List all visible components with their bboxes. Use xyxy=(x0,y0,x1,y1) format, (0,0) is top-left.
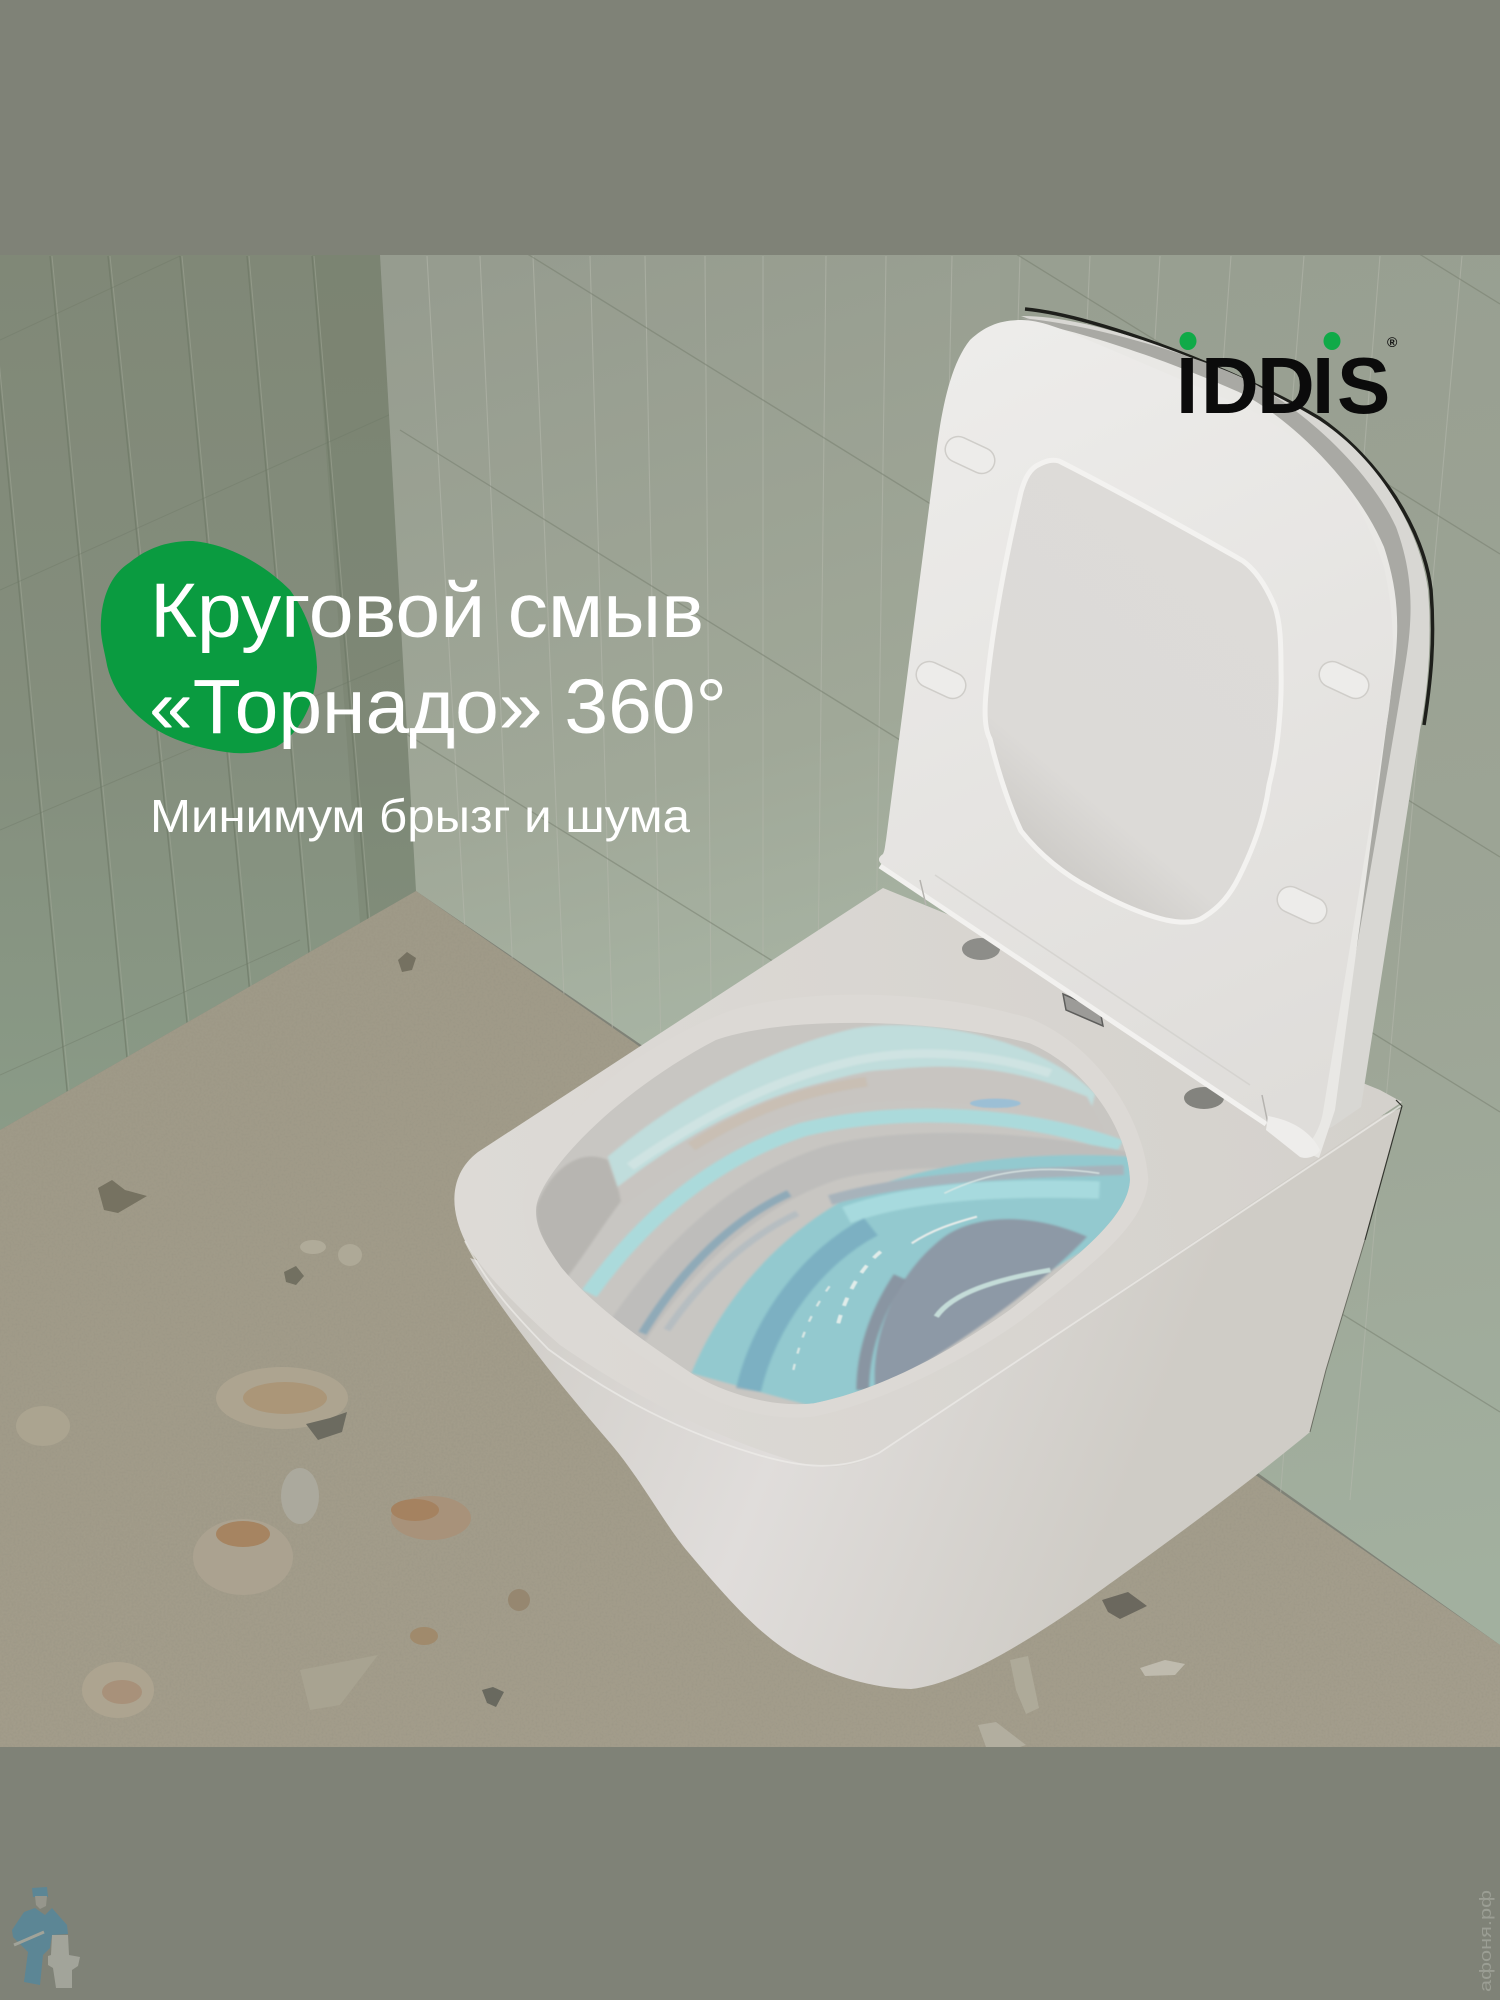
lid face xyxy=(879,320,1393,1150)
toilet seat lid xyxy=(879,309,1433,1158)
toilet xyxy=(454,888,1402,1689)
background band: bottom xyxy=(0,1747,1500,2000)
lid plate lines xyxy=(880,866,1266,1124)
IDDIS logo: IDDIS xyxy=(1176,341,1390,430)
lid recess xyxy=(985,460,1281,922)
hinge cover xyxy=(1266,1116,1320,1158)
icon: plumber with toilet watermark xyxy=(12,1887,80,1988)
hinges xyxy=(962,938,1224,1109)
headline: Круговой смыв xyxy=(150,568,704,654)
subheading: Минимум брызг и шума xyxy=(150,790,690,842)
toilet body xyxy=(470,1108,1402,1689)
floor xyxy=(0,891,1500,1747)
left wall xyxy=(0,255,416,1130)
bumpers xyxy=(912,432,1373,928)
headline xyxy=(149,568,727,750)
IDDIS logo: ® xyxy=(1387,334,1398,350)
lid outer edge xyxy=(1021,316,1430,1135)
lid grey groove xyxy=(1021,318,1411,1135)
lid shadow line xyxy=(1025,309,1433,725)
background band: top xyxy=(0,0,1500,256)
headline: «Торнадо» 360° xyxy=(149,664,727,750)
watermark text: афоня.рф xyxy=(1476,1890,1495,1992)
toilet bowl and swirling water xyxy=(536,1023,1130,1404)
floor stones xyxy=(16,952,1185,1747)
green accent blob xyxy=(101,541,317,753)
lid white rim xyxy=(1021,320,1397,1158)
right wall xyxy=(380,255,1500,1645)
toilet rim xyxy=(454,888,1402,1467)
